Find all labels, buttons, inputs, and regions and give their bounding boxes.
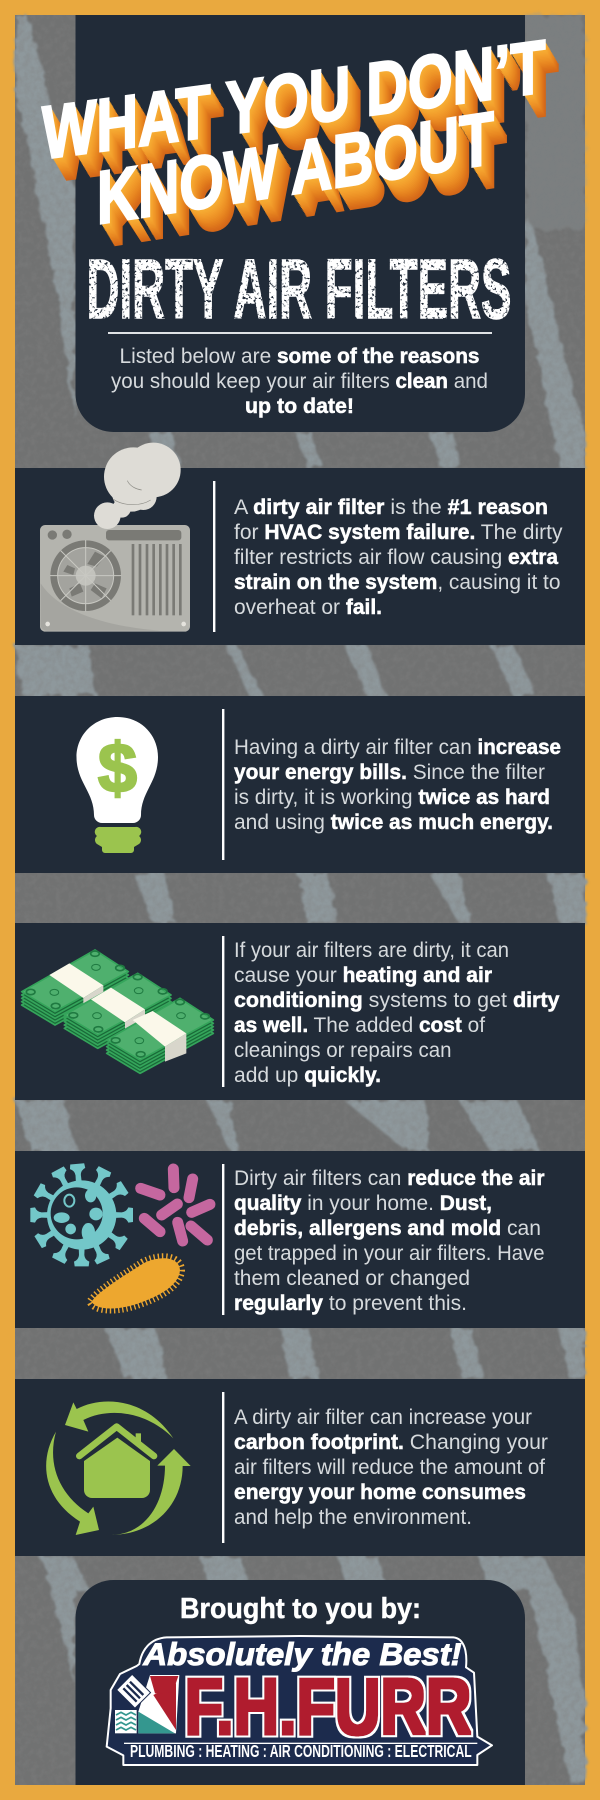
text: air quality: Dirty air filters can reduce the air bbox=[234, 1167, 544, 1190]
text: air quality bbox=[234, 1167, 544, 1315]
text: energy bills: and using twice as much energy. bbox=[234, 811, 553, 834]
text: carbon footprint: and help the environment. bbox=[234, 1506, 472, 1529]
panel: air quality bbox=[15, 1151, 585, 1328]
intro text: up to date! bbox=[245, 395, 354, 418]
text: air quality: regularly to prevent this. bbox=[234, 1292, 467, 1315]
title: what you don't know about bbox=[40, 23, 559, 246]
logo: F.H. Furr: F.H.FURR bbox=[185, 1662, 471, 1751]
text: system failure: A dirty air filter is the #1 reason bbox=[234, 496, 548, 519]
text: system failure: strain on the system, causing it to bbox=[234, 571, 560, 594]
panel: intro header bbox=[76, 15, 525, 432]
text: air quality: quality in your home. Dust, bbox=[234, 1192, 492, 1215]
intro text bbox=[111, 345, 488, 418]
intro text: Listed below are some of the reasons bbox=[120, 345, 479, 368]
icon: light bulb with dollar sign bbox=[76, 717, 158, 853]
bacteria bbox=[141, 1169, 210, 1241]
text: dirty systems: cleanings or repairs can bbox=[234, 1039, 452, 1062]
title line one: WHAT YOU DON’T bbox=[42, 23, 545, 174]
text: air quality: get trapped in your air filters. Have bbox=[234, 1242, 544, 1265]
text: system failure: filter restricts air flow causing extra bbox=[234, 546, 558, 569]
panel: dirty heating and air systems bbox=[15, 923, 585, 1100]
text: dirty systems: conditioning systems to get dirty bbox=[234, 989, 560, 1012]
icon: stacks of cash bbox=[22, 950, 213, 1073]
text: dirty systems: as well. The added cost of bbox=[234, 1014, 485, 1037]
text: carbon footprint: energy your home consumes bbox=[234, 1481, 526, 1504]
text: system failure: for HVAC system failure. The dirty bbox=[234, 521, 563, 544]
text: energy bills bbox=[234, 736, 561, 834]
icon: smoking air conditioner bbox=[40, 443, 190, 632]
logo: F.H. Furr bbox=[107, 1636, 492, 1765]
text: air quality: debris, allergens and mold can bbox=[234, 1217, 541, 1240]
text: dirty systems: If your air filters are dirty, it can bbox=[234, 939, 509, 962]
text: dirty systems: cause your heating and air bbox=[234, 964, 492, 987]
logo: F.H. Furr: Absolutely the Best! bbox=[142, 1637, 462, 1672]
icon: light bulb with dollar sign: $ bbox=[98, 729, 137, 807]
text: energy bills: Having a dirty air filter can increase bbox=[234, 736, 561, 759]
text: carbon footprint: carbon footprint. Changing your bbox=[234, 1431, 548, 1454]
text: carbon footprint bbox=[234, 1406, 548, 1529]
panel: energy bills bbox=[15, 696, 585, 873]
text: energy bills: is dirty, it is working twice as hard bbox=[234, 786, 550, 809]
text: system failure: overheat or fail. bbox=[234, 596, 382, 619]
text: system failure bbox=[234, 496, 563, 619]
panel: HVAC system failure bbox=[15, 443, 585, 645]
panel: sponsor footer bbox=[76, 1580, 525, 1785]
logo mark bbox=[115, 1674, 179, 1733]
title line two: KNOW ABOUT bbox=[97, 95, 494, 239]
text: energy bills: your energy bills. Since the filter bbox=[234, 761, 545, 784]
text: dirty systems bbox=[234, 939, 560, 1087]
heading: brought to you by: Brought to you by: bbox=[180, 1593, 421, 1625]
panel: carbon footprint bbox=[15, 1379, 585, 1556]
mold spore bbox=[92, 1258, 180, 1309]
intro text: you should keep your air filters clean and bbox=[111, 370, 488, 393]
icon: virus, bacteria and mold bbox=[30, 1163, 210, 1309]
text: air quality: them cleaned or changed bbox=[234, 1267, 470, 1290]
icon: house in recycling arrows bbox=[46, 1401, 191, 1535]
text: carbon footprint: A dirty air filter can increase your bbox=[234, 1406, 532, 1429]
virus bbox=[30, 1163, 133, 1266]
text: carbon footprint: air filters will reduce the amount of bbox=[234, 1456, 545, 1479]
text: dirty systems: add up quickly. bbox=[234, 1064, 381, 1087]
